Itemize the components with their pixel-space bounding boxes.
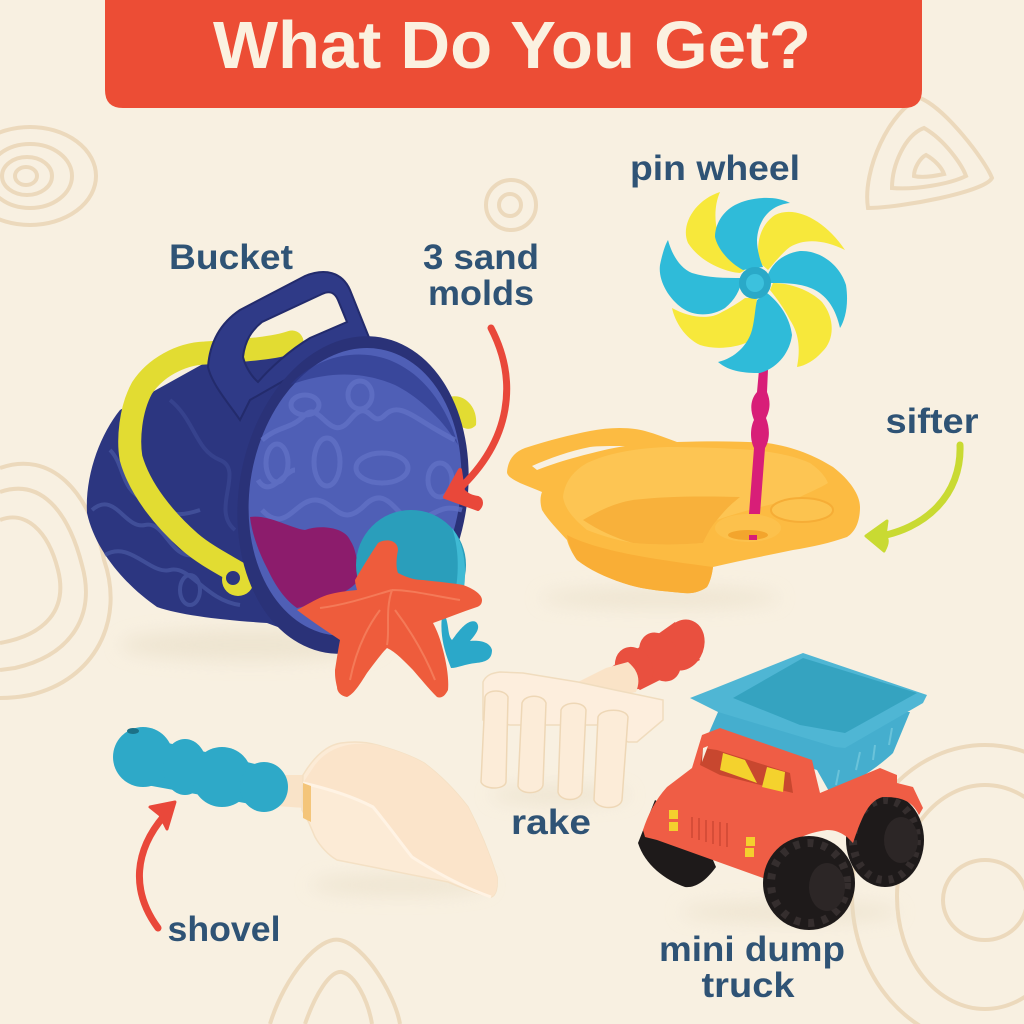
label: bucket: Bucket <box>169 238 293 277</box>
label: pin wheel: pin wheel <box>630 149 800 188</box>
arrow: sifter <box>866 445 960 551</box>
mold: orange starfish <box>297 540 482 697</box>
arrow: molds <box>445 328 507 509</box>
sifter <box>507 428 860 593</box>
label: mini dump truck: mini dump <box>659 930 845 969</box>
truck: windshield <box>700 748 793 793</box>
pin wheel blue blades <box>660 198 847 373</box>
title banner: What Do You Get? <box>213 8 811 83</box>
mold: blue crab <box>441 610 492 668</box>
label: sifter: sifter <box>886 402 979 441</box>
bucket <box>87 272 493 672</box>
mold: purple coral <box>250 517 357 608</box>
truck: far front wheel <box>638 800 716 887</box>
sand molds <box>250 510 492 697</box>
shovel <box>113 727 497 897</box>
truck: front wheel <box>763 836 855 930</box>
truck: grille and headlights <box>669 810 755 857</box>
rake head <box>483 672 663 742</box>
shovel scoop <box>302 742 497 897</box>
label: 3 sand molds: 3 sand <box>423 238 539 277</box>
pin wheel stick <box>749 370 770 514</box>
title banner <box>105 0 922 108</box>
truck: body <box>643 728 923 883</box>
mini dump truck <box>638 653 927 930</box>
bucket strap <box>130 342 292 574</box>
pin wheel <box>660 192 847 540</box>
shovel neck <box>276 775 305 808</box>
bucket rim and interior <box>213 318 493 672</box>
arrow: shovel <box>139 802 175 928</box>
label: shovel: shovel <box>168 910 280 949</box>
label: rake: rake <box>511 803 591 842</box>
label: 3 sand molds: molds <box>428 274 534 313</box>
label: mini dump truck: truck <box>702 966 795 1005</box>
truck: dump bed <box>690 653 927 793</box>
pin wheel yellow blades <box>672 192 845 367</box>
mold: teal ball <box>356 510 466 620</box>
rake <box>481 613 712 808</box>
shovel handle <box>113 727 288 812</box>
bucket handle <box>208 272 372 420</box>
truck: rear wheel <box>846 793 924 887</box>
pin wheel hub <box>739 267 771 299</box>
rake handle <box>607 613 712 696</box>
